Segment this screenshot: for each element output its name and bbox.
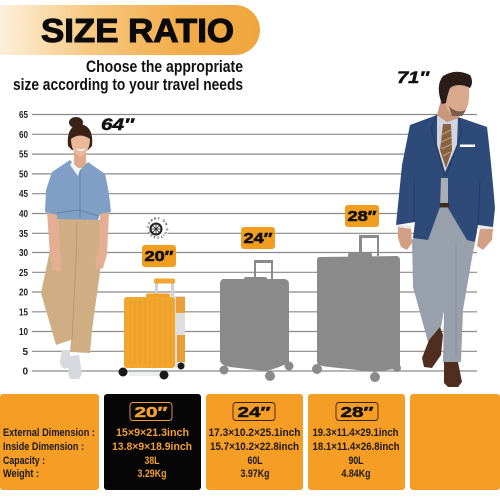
spec panel: 20 inch [104, 394, 201, 490]
grey suitcase 24 inch [220, 260, 294, 381]
height scale: 15 [19, 307, 28, 318]
subtitle [13, 57, 243, 94]
subtitle: size according to your travel needs [13, 75, 243, 94]
belt [440, 203, 449, 208]
spec panel: 20 inch: 15×9×21.3inch [116, 427, 189, 439]
spec panel: 28 inch: 19.3×11.4×29.1inch [312, 427, 399, 439]
size badge 20 [142, 245, 176, 267]
spec panel: 28 inch [308, 394, 405, 490]
hair [68, 117, 92, 150]
height scale: 45 [19, 189, 28, 200]
spec panel: 20 inch: 13.8×9×18.9inch [112, 441, 192, 453]
height scale: 25 [19, 268, 28, 279]
spec panel: 24 inch: 3.97Kg [240, 468, 270, 480]
shirt [437, 115, 458, 172]
size badge 28: 28″ [348, 208, 376, 225]
blazer sleeve shading [414, 180, 480, 225]
spec panel: 28 inch: 4.84Kg [342, 468, 370, 480]
height scale: 10 [19, 327, 28, 338]
height label 64: 64″ [101, 115, 135, 134]
forearms and hands [47, 212, 62, 272]
spec panel: 24 inch: 24″ [238, 404, 270, 421]
sneakers [60, 350, 82, 379]
height scale: 50 [19, 170, 28, 180]
hair [439, 72, 472, 104]
size badge 20: 20″ [144, 248, 174, 265]
spec panel: 20 inch: 20″ [134, 404, 168, 421]
subtitle: Choose the appropriate [86, 57, 243, 76]
spec panel: 28 inch: 90L [348, 455, 364, 467]
face [445, 84, 469, 116]
spec panel: empty [410, 394, 500, 490]
neck [74, 150, 86, 168]
neck [437, 100, 459, 122]
height scale: 35 [19, 229, 28, 240]
height scale: 5 [22, 347, 28, 358]
woman figure [41, 117, 111, 379]
orange suitcase 20 inch [118, 278, 185, 380]
spec panel: 24 inch: 15.7×10.2×22.8inch [210, 441, 299, 453]
title banner [0, 5, 260, 55]
height scale: 60 [19, 130, 28, 141]
height label 71: 71″ [397, 68, 430, 87]
hands [398, 226, 493, 250]
height scale: 65 [19, 110, 28, 121]
denim shirt [45, 160, 111, 220]
striped tie [440, 124, 452, 168]
spec panel: 20 inch: 3.29Kg [138, 468, 166, 480]
grey suitcase 28 inch [312, 235, 401, 382]
spec panel: 28 inch: 18.1×11.4×26.8inch [312, 441, 400, 453]
shoes [422, 327, 462, 387]
navy blazer [396, 115, 495, 242]
face [71, 136, 90, 157]
spec panel: 24 inch: 60L [248, 455, 263, 467]
size badge 28 [345, 205, 379, 227]
height scale: 40 [19, 209, 28, 220]
spec panel: 24 inch [206, 394, 303, 490]
pocket square [460, 144, 475, 147]
spec panel: 24 inch: 17.3×10.2×25.1inch [208, 427, 301, 439]
spec panel: 20 inch: 38L [144, 455, 160, 467]
trousers [412, 205, 475, 362]
height scale: 0 [22, 366, 28, 378]
height scale: 55 [19, 150, 28, 160]
spec panel: row labels [0, 394, 99, 490]
lapels [431, 115, 462, 176]
spec panel: 28 inch: 28″ [340, 404, 374, 421]
shirt cuffs [397, 224, 493, 229]
man figure [396, 72, 495, 387]
spec panel: row labels: Weight : [3, 468, 39, 480]
spec panel: row labels: Capacity : [3, 455, 45, 467]
height scale [19, 110, 477, 378]
spec panel: row labels: External Dimension : [3, 427, 95, 439]
shirt and tie opening [440, 178, 448, 208]
height scale: 30 [19, 248, 28, 259]
size badge 24: 24″ [244, 230, 272, 247]
height scale: 20 [19, 288, 28, 298]
title banner: SIZE RATIO [41, 12, 234, 49]
trousers [41, 218, 101, 353]
carry-on stamp icon: CARRY ON SUITCASE [146, 217, 168, 239]
spec panel: row labels: Inside Dimension : [3, 441, 84, 453]
size badge 24 [241, 227, 275, 249]
